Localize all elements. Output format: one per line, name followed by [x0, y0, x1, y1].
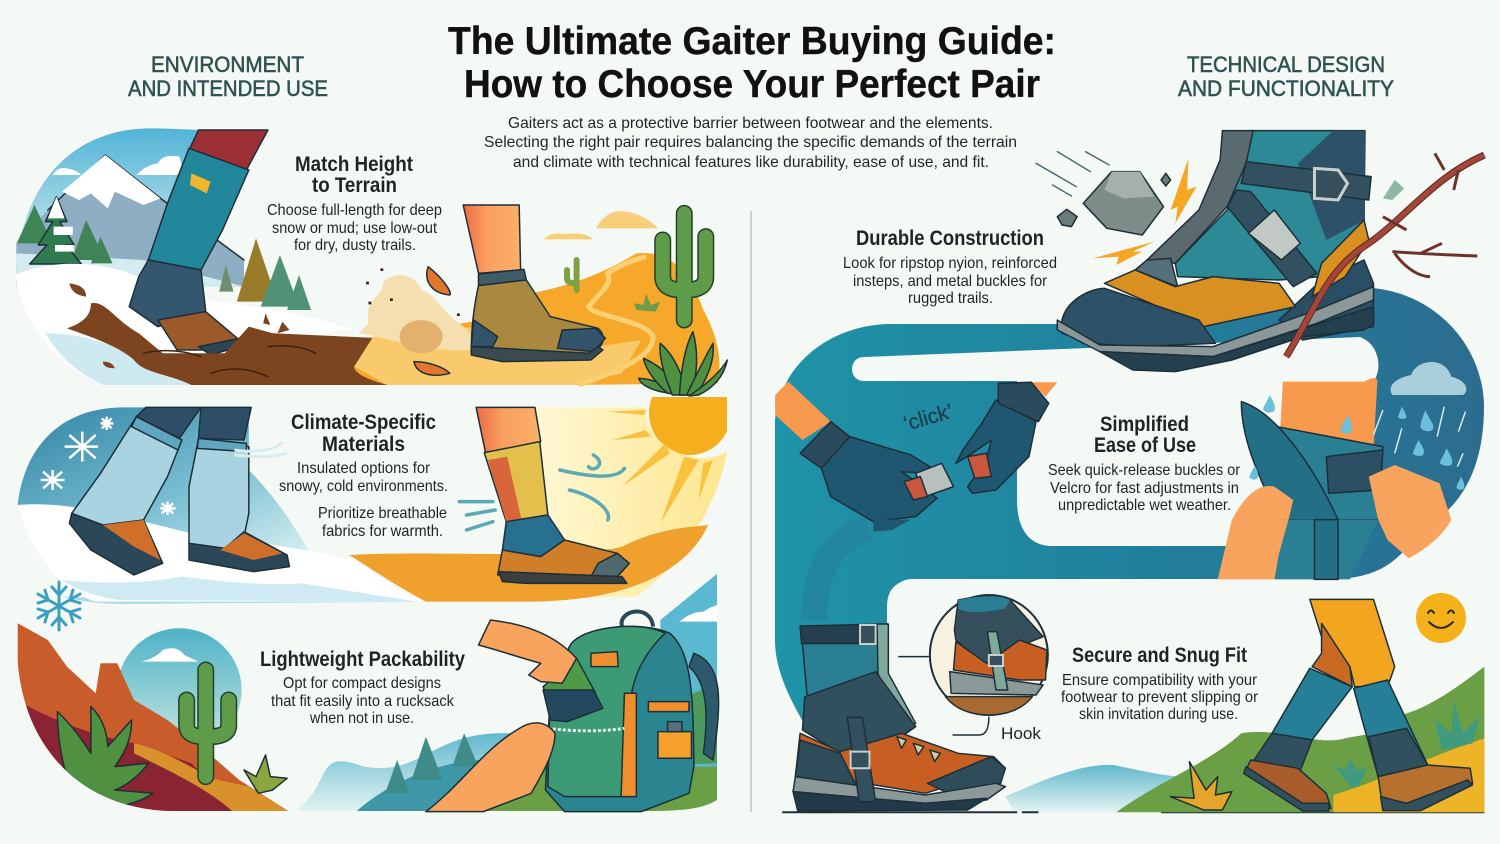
text: match height: Match Height — [295, 153, 413, 176]
icon: agave — [639, 332, 727, 396]
illustration: leg with velcro closure and rain — [1232, 362, 1466, 520]
text: packability: Lightweight Packability — [260, 648, 465, 671]
text: climate: snowy, cold environments. — [279, 478, 448, 495]
boot — [1175, 131, 1365, 280]
text: ease of use: Seek quick-release buckles or — [1048, 462, 1241, 479]
illustration: gloved hands fastening buckle — [775, 382, 1057, 522]
inset: hook detail — [930, 595, 1048, 715]
text: durable — [843, 227, 1057, 307]
icon: sun — [649, 397, 727, 455]
text: climate: Prioritize breathable — [318, 505, 447, 522]
text: ease of use: Ease of Use — [1094, 434, 1196, 457]
intro text: Selecting the right pair requires balancing the specific demands of the terrain — [484, 134, 1017, 151]
text: ease of use: unpredictable wet weather. — [1058, 497, 1231, 514]
title — [448, 20, 1056, 106]
text: packability: that fit easily into a rucksack — [271, 693, 455, 710]
text: durable: insteps, and metal buckles for — [853, 273, 1048, 290]
insulated gaiters and boots — [69, 407, 289, 575]
callout lines — [898, 657, 989, 735]
title: How to Choose Your Perfect Pair — [464, 63, 1040, 106]
illustration: boot with gaiter and hook inset — [782, 595, 1484, 812]
illustration: snowy scene with insulated gaiters — [18, 407, 421, 604]
label: hook: Hook — [1001, 724, 1042, 743]
heading: environment and intended use: ENVIRONMENT — [151, 52, 304, 77]
text: durable: rugged trails. — [908, 290, 993, 307]
intro text: Gaiters act as a protective barrier between footwear and the elements. — [508, 115, 993, 132]
intro text: and climate with technical features like durability, ease of use, and fit. — [513, 154, 989, 171]
panel: lightweight packability — [18, 573, 719, 813]
text: climate: Materials — [322, 433, 405, 456]
text: match height — [267, 153, 442, 254]
text: match height: to Terrain — [312, 174, 397, 197]
intro text — [484, 115, 1017, 171]
text: match height: snow or mud; use low-out — [272, 220, 437, 237]
text: ease of use — [1048, 413, 1241, 514]
text: match height: Choose full-length for deep — [267, 202, 442, 219]
heading: environment and intended use: AND INTENDED USE — [128, 76, 328, 101]
text: match height: for dry, dusty trails. — [294, 237, 416, 254]
text: secure fit: footwear to prevent slipping or — [1061, 689, 1259, 706]
illustration: hiker legs on green hills — [1116, 599, 1484, 812]
illustration: snowy mountain scene with tall gaiter — [15, 128, 388, 385]
panel: secure and snug fit — [782, 593, 1484, 812]
text: ease of use: Velcro for fast adjustments in — [1050, 480, 1239, 497]
panel: match height to terrain — [15, 128, 727, 396]
panel: durable construction — [843, 131, 1484, 372]
heading: technical design and functionality: AND FUNCTIONALITY — [1178, 76, 1394, 101]
icon: rock — [1083, 172, 1163, 235]
text: climate: fabrics for warmth. — [322, 523, 443, 540]
illustration: desert trail with low gaiter — [354, 205, 727, 396]
text: secure fit: Secure and Snug Fit — [1072, 644, 1247, 667]
tall gaiter and boot — [129, 130, 268, 355]
icon: smiley — [1416, 593, 1466, 643]
text: ease of use: Simplified — [1100, 413, 1189, 436]
panel: simplified ease of use — [775, 362, 1466, 620]
text: secure fit: Ensure compatibility with your — [1062, 672, 1258, 689]
text: secure fit — [1061, 644, 1259, 723]
heading: environment and intended use — [128, 52, 328, 101]
heading: technical design and functionality — [1178, 52, 1394, 101]
text: secure fit: skin invitation during use. — [1079, 706, 1238, 723]
heading: technical design and functionality: TECHNICAL DESIGN — [1187, 52, 1385, 77]
icon: large snowflake — [38, 582, 80, 630]
label: click: ‘click’ — [901, 400, 956, 436]
illustration: backpack and hands — [426, 612, 719, 812]
panel: climate-specific materials — [18, 371, 731, 630]
text: durable: Look for ripstop nyion, reinforced — [843, 255, 1057, 272]
straps and buckles — [1241, 162, 1371, 200]
illustration: armoured boot with rock and thorn — [1036, 131, 1484, 372]
text: packability: Opt for compact designs — [283, 675, 441, 692]
text: climate: Insulated options for — [297, 460, 431, 477]
icon: thorny branch — [1286, 155, 1484, 357]
text: climate — [279, 411, 448, 540]
illustration: desert rocks and cactus — [18, 573, 718, 813]
illustration: sunny desert with breathable gaiter — [349, 407, 727, 602]
text: packability: when not in use. — [309, 710, 414, 727]
text: packability — [260, 648, 465, 727]
text: durable: Durable Construction — [856, 227, 1044, 250]
teal connector ribbon — [775, 288, 1484, 720]
title: The Ultimate Gaiter Buying Guide: — [448, 20, 1056, 63]
text: climate: Climate-Specific — [291, 411, 436, 434]
